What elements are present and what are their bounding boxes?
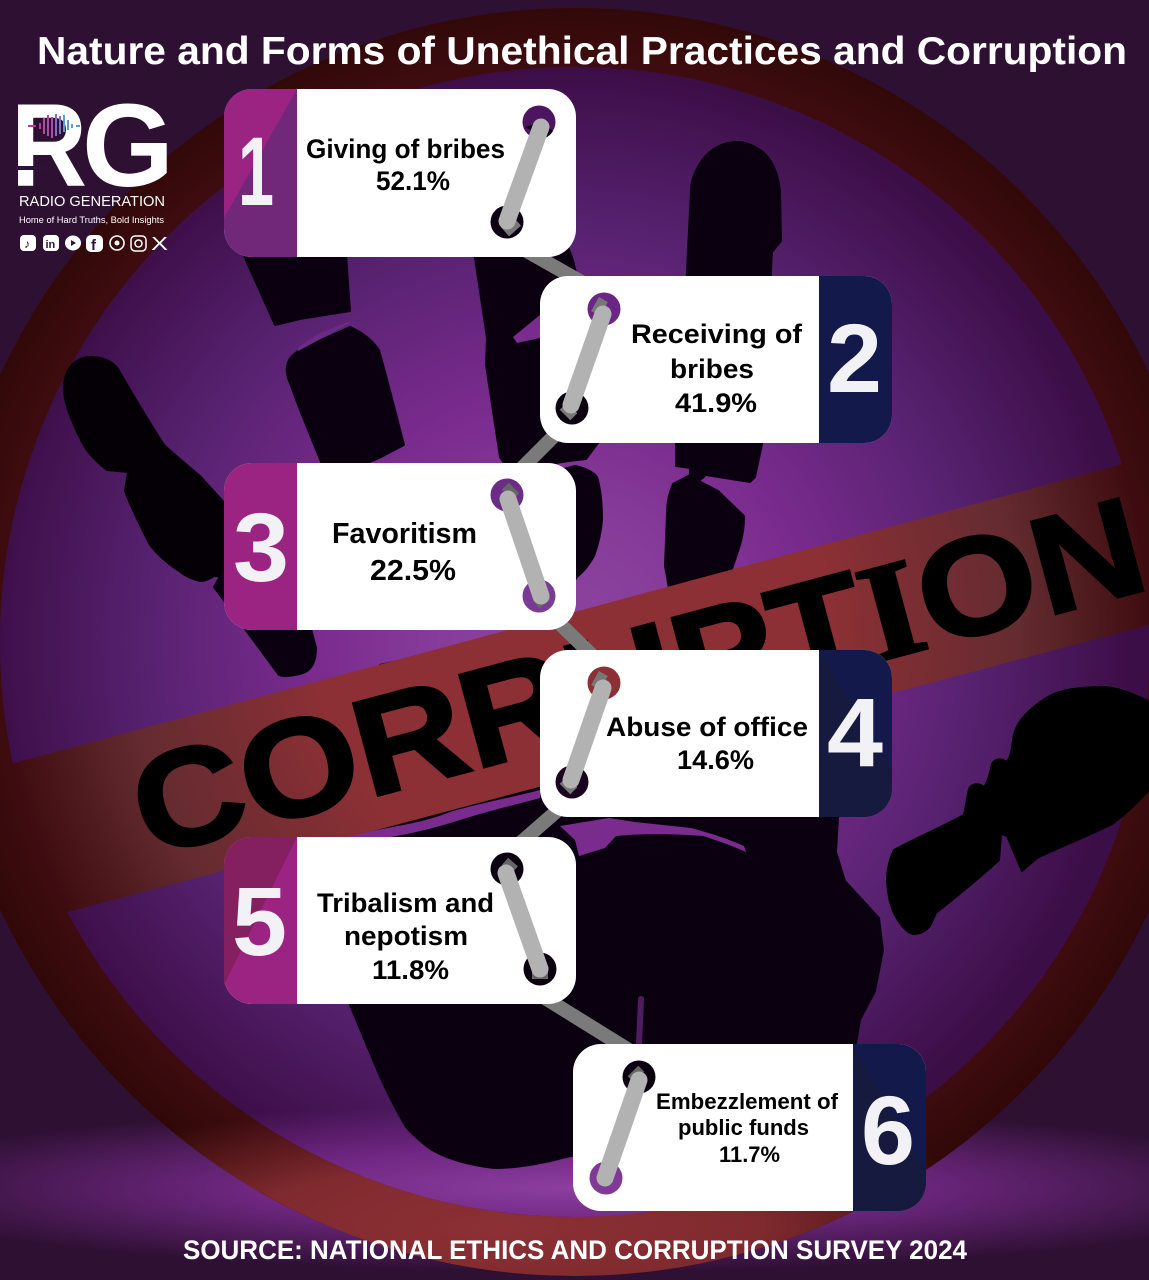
card 5: Tribalism and — [317, 888, 494, 918]
source line: SOURCE: NATIONAL ETHICS AND CORRUPTION SURVEY 2024 — [183, 1235, 967, 1265]
title: Nature and Forms of Unethical Practices and Corruption — [37, 30, 1127, 73]
card 1: Giving of bribes — [306, 134, 505, 164]
card 4: 4 — [827, 678, 883, 787]
card 6: public funds — [678, 1115, 809, 1140]
pinky base — [214, 570, 316, 676]
card 3: Favoritism — [332, 518, 477, 550]
logo cuts — [15, 166, 50, 170]
card 5: nepotism — [344, 921, 468, 951]
social icons: ♪ — [24, 237, 30, 251]
card 5 — [224, 837, 576, 1004]
banner word: CORRUPTION — [116, 468, 1149, 886]
ring finger lower — [287, 327, 404, 480]
card 5: 11.8% — [372, 955, 449, 985]
card 1 — [224, 89, 576, 257]
palm — [320, 650, 883, 1168]
social icons: f — [91, 237, 97, 254]
card 6: 11.7% — [719, 1142, 780, 1167]
crease: ring finger joint — [298, 322, 350, 350]
card 2: 2 — [827, 304, 882, 413]
card 2 — [540, 276, 892, 443]
ring finger upper — [240, 240, 350, 325]
social icons — [20, 234, 168, 254]
middle finger lower — [560, 466, 602, 600]
card 6 — [573, 1044, 926, 1211]
card 3: 3 — [233, 493, 289, 602]
card 4 — [540, 650, 892, 817]
logo: Radio Generation: G — [82, 80, 174, 212]
logo letters: R — [11, 80, 87, 212]
card 3 — [224, 463, 576, 630]
card 4: 14.6% — [677, 745, 754, 775]
palm purple creases — [560, 818, 746, 856]
card 5: 5 — [232, 867, 287, 976]
hand silhouette — [64, 142, 1148, 1168]
purple spot on middle finger — [513, 315, 540, 343]
card 2: bribes — [670, 354, 754, 384]
logo waveform — [28, 114, 80, 138]
logo: Radio Generation — [11, 80, 174, 254]
middle finger upper — [470, 240, 598, 470]
social icons: X — [151, 234, 168, 254]
card 1: 1 — [238, 117, 274, 226]
card 1: 52.1% — [376, 166, 450, 196]
pinky finger — [64, 357, 260, 581]
crease: lower palm — [639, 999, 641, 1044]
logo tagline: Home of Hard Truths, Bold Insights — [19, 215, 164, 226]
card 6: 6 — [861, 1076, 915, 1185]
card 6: Embezzlement of — [656, 1089, 839, 1114]
index finger lower — [665, 430, 765, 600]
card 2: 41.9% — [675, 388, 757, 418]
connector lines between cards — [518, 250, 632, 1052]
purple streak under banner — [345, 790, 540, 838]
logo name: RADIO GENERATION — [19, 193, 165, 210]
card 4: Abuse of office — [606, 712, 808, 742]
card 3: 22.5% — [370, 555, 456, 587]
thumb — [887, 687, 1148, 934]
index finger upper — [686, 142, 781, 290]
card 2: Receiving of — [631, 319, 803, 349]
social icons: in — [46, 239, 56, 251]
